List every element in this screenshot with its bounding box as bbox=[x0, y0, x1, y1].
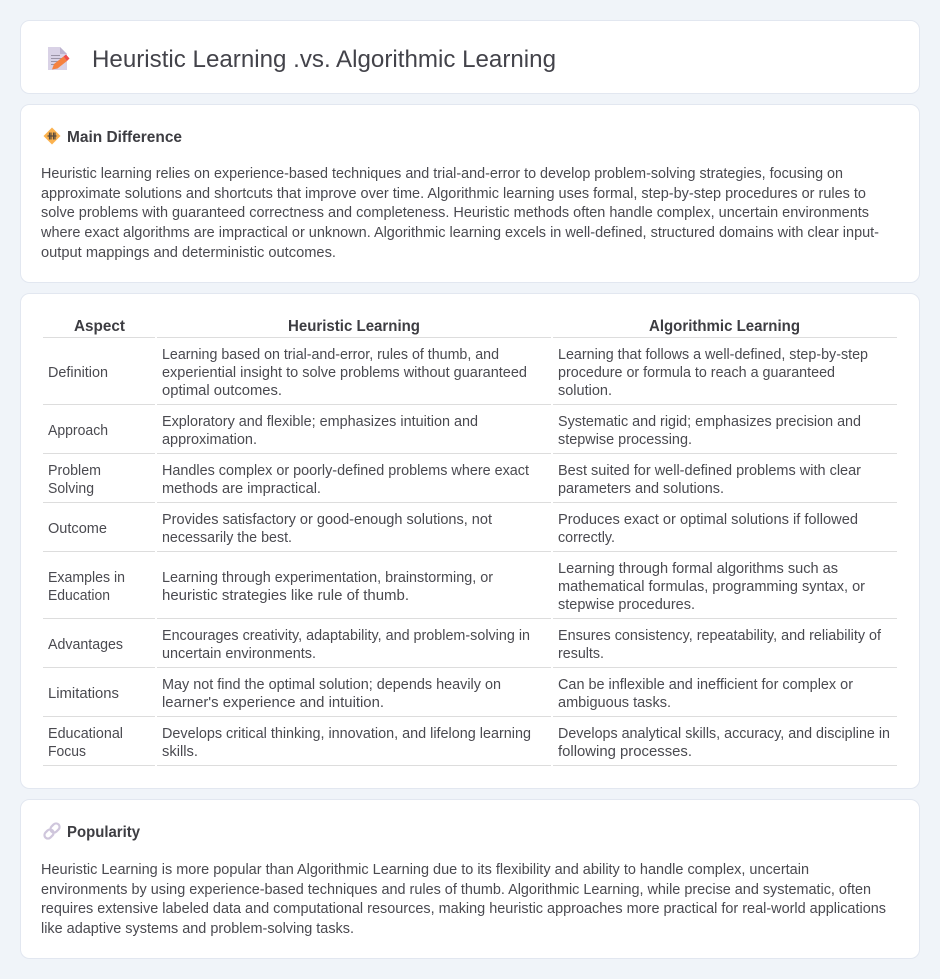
row: problem solving: Handles complex or poorly-defined problems where exact bbox=[162, 463, 529, 479]
row: advantages bbox=[43, 628, 897, 668]
row: definition: experiential insight to solve problems without guaranteed bbox=[162, 365, 527, 381]
row: educational focus: Develops analytical skills, accuracy, and discipline in bbox=[558, 726, 890, 742]
row: examples in education: heuristic strategies like rule of thumb. bbox=[162, 588, 409, 604]
text block: popularity: Heuristic Learning is more popular than Algorithmic Learning due to its flexibility and ability to handle complex, uncertain bbox=[41, 862, 809, 878]
row: limitations: Limitations bbox=[48, 686, 119, 702]
row: outcome: Produces exact or optimal solutions if followed bbox=[558, 512, 858, 528]
row: problem solving: methods are impractical. bbox=[162, 481, 321, 497]
row: educational focus: Educational bbox=[48, 726, 123, 742]
row: approach: Systematic and rigid; emphasizes precision and bbox=[558, 414, 861, 430]
row: approach: Approach bbox=[48, 423, 108, 439]
row: definition: optimal outcomes. bbox=[162, 383, 282, 399]
row: problem solving: Best suited for well-defined problems with clear bbox=[558, 463, 861, 479]
panel: popularity bbox=[20, 800, 920, 958]
row: definition: solution. bbox=[558, 383, 612, 399]
row: educational focus: skills. bbox=[162, 744, 198, 760]
row: approach: stepwise processing. bbox=[558, 432, 692, 448]
text block: main difference bbox=[40, 166, 879, 261]
row: examples in education bbox=[43, 561, 897, 619]
row: approach: Exploratory and flexible; emphasizes intuition and bbox=[162, 414, 478, 430]
row: advantages: results. bbox=[558, 646, 604, 662]
row: advantages: Advantages bbox=[48, 637, 123, 653]
text block: popularity: environments by using experience-based techniques and rules of thumb. Algorithmic Learning, while precise and systematic, often bbox=[41, 882, 871, 898]
row: advantages: Encourages creativity, adaptability, and problem-solving in bbox=[162, 628, 530, 644]
row: problem solving: Problem bbox=[48, 463, 101, 479]
panel: title bbox=[20, 20, 920, 94]
text block: main difference: approximate solutions and shortcuts that improve over time. Algorithmic learning uses formal, step-by-step procedures or rules to bbox=[41, 186, 866, 202]
row: limitations: Can be inflexible and inefficient for complex or bbox=[558, 677, 853, 693]
icon: diamond sign bbox=[44, 128, 60, 144]
row: definition: Learning that follows a well-defined, step-by-step bbox=[558, 347, 868, 363]
row: examples in education: Examples in bbox=[48, 570, 125, 586]
row: limitations bbox=[43, 677, 897, 717]
row: definition bbox=[43, 347, 897, 405]
text block: popularity: like adaptive systems and problem-solving tasks. bbox=[41, 921, 354, 937]
row: educational focus: Focus bbox=[48, 744, 86, 760]
heading: page title: Heuristic Learning .vs. Algorithmic Learning bbox=[92, 46, 556, 73]
row: outcome: necessarily the best. bbox=[162, 530, 292, 546]
row: educational focus: following processes. bbox=[558, 744, 692, 760]
table header: Algorithmic Learning bbox=[649, 318, 800, 335]
row: educational focus: Develops critical thinking, innovation, and lifelong learning bbox=[162, 726, 531, 742]
row: educational focus bbox=[43, 726, 897, 766]
row: problem solving: Solving bbox=[48, 481, 94, 497]
panel: comparison table bbox=[20, 294, 920, 788]
row: examples in education: mathematical formulas, programming syntax, or bbox=[558, 579, 865, 595]
row: advantages: Ensures consistency, repeatability, and reliability of bbox=[558, 628, 882, 644]
row: outcome bbox=[43, 512, 897, 552]
icon: document with pencil bbox=[48, 47, 70, 70]
row: outcome: correctly. bbox=[558, 530, 615, 546]
row: limitations: learner's experience and intuition. bbox=[162, 695, 384, 711]
row: outcome: Provides satisfactory or good-enough solutions, not bbox=[162, 512, 492, 528]
row: definition: procedure or formula to reach a guaranteed bbox=[558, 365, 835, 381]
text block: popularity bbox=[41, 862, 886, 937]
row: approach: approximation. bbox=[162, 432, 257, 448]
row: examples in education: Learning through experimentation, brainstorming, or bbox=[162, 570, 493, 586]
table header: Heuristic Learning bbox=[288, 318, 420, 335]
table header bbox=[43, 318, 897, 338]
heading: popularity: Popularity bbox=[67, 824, 140, 841]
row: examples in education: Learning through formal algorithms such as bbox=[558, 561, 838, 577]
row: definition: Learning based on trial-and-error, rules of thumb, and bbox=[162, 347, 499, 363]
text block: main difference: output mappings and deterministic outcomes. bbox=[41, 245, 336, 261]
row: outcome: Outcome bbox=[48, 521, 107, 537]
table header: Aspect bbox=[74, 318, 126, 335]
row: definition: Definition bbox=[48, 365, 108, 381]
row: examples in education: Education bbox=[48, 588, 110, 604]
text block: main difference: Heuristic learning relies on experience-based techniques and trial-and-error to develop problem-solving strategies, focusing on bbox=[41, 166, 843, 182]
row: problem solving: parameters and solutions. bbox=[558, 481, 724, 497]
text block: popularity: requires extensive labeled data and computational resources, making heuristic approaches more practical for real-world applications bbox=[41, 901, 886, 917]
text block: main difference: solve problems with guaranteed correctness and completeness. Heuristic methods often handle complex, uncertain environments bbox=[41, 205, 869, 221]
row: limitations: ambiguous tasks. bbox=[558, 695, 671, 711]
panel: main difference bbox=[20, 104, 920, 282]
row: examples in education: stepwise procedures. bbox=[558, 597, 695, 613]
row: approach bbox=[43, 414, 897, 454]
text block: main difference: where exact algorithms are impractical or unknown. Algorithmic learning excels in well-defined, structured domains with clear input- bbox=[40, 225, 879, 241]
row: problem solving bbox=[43, 463, 897, 503]
icon: chain link bbox=[43, 822, 61, 840]
row: advantages: uncertain environments. bbox=[162, 646, 316, 662]
row: limitations: May not find the optimal solution; depends heavily on bbox=[162, 677, 501, 693]
heading: main difference: Main Difference bbox=[67, 129, 182, 146]
